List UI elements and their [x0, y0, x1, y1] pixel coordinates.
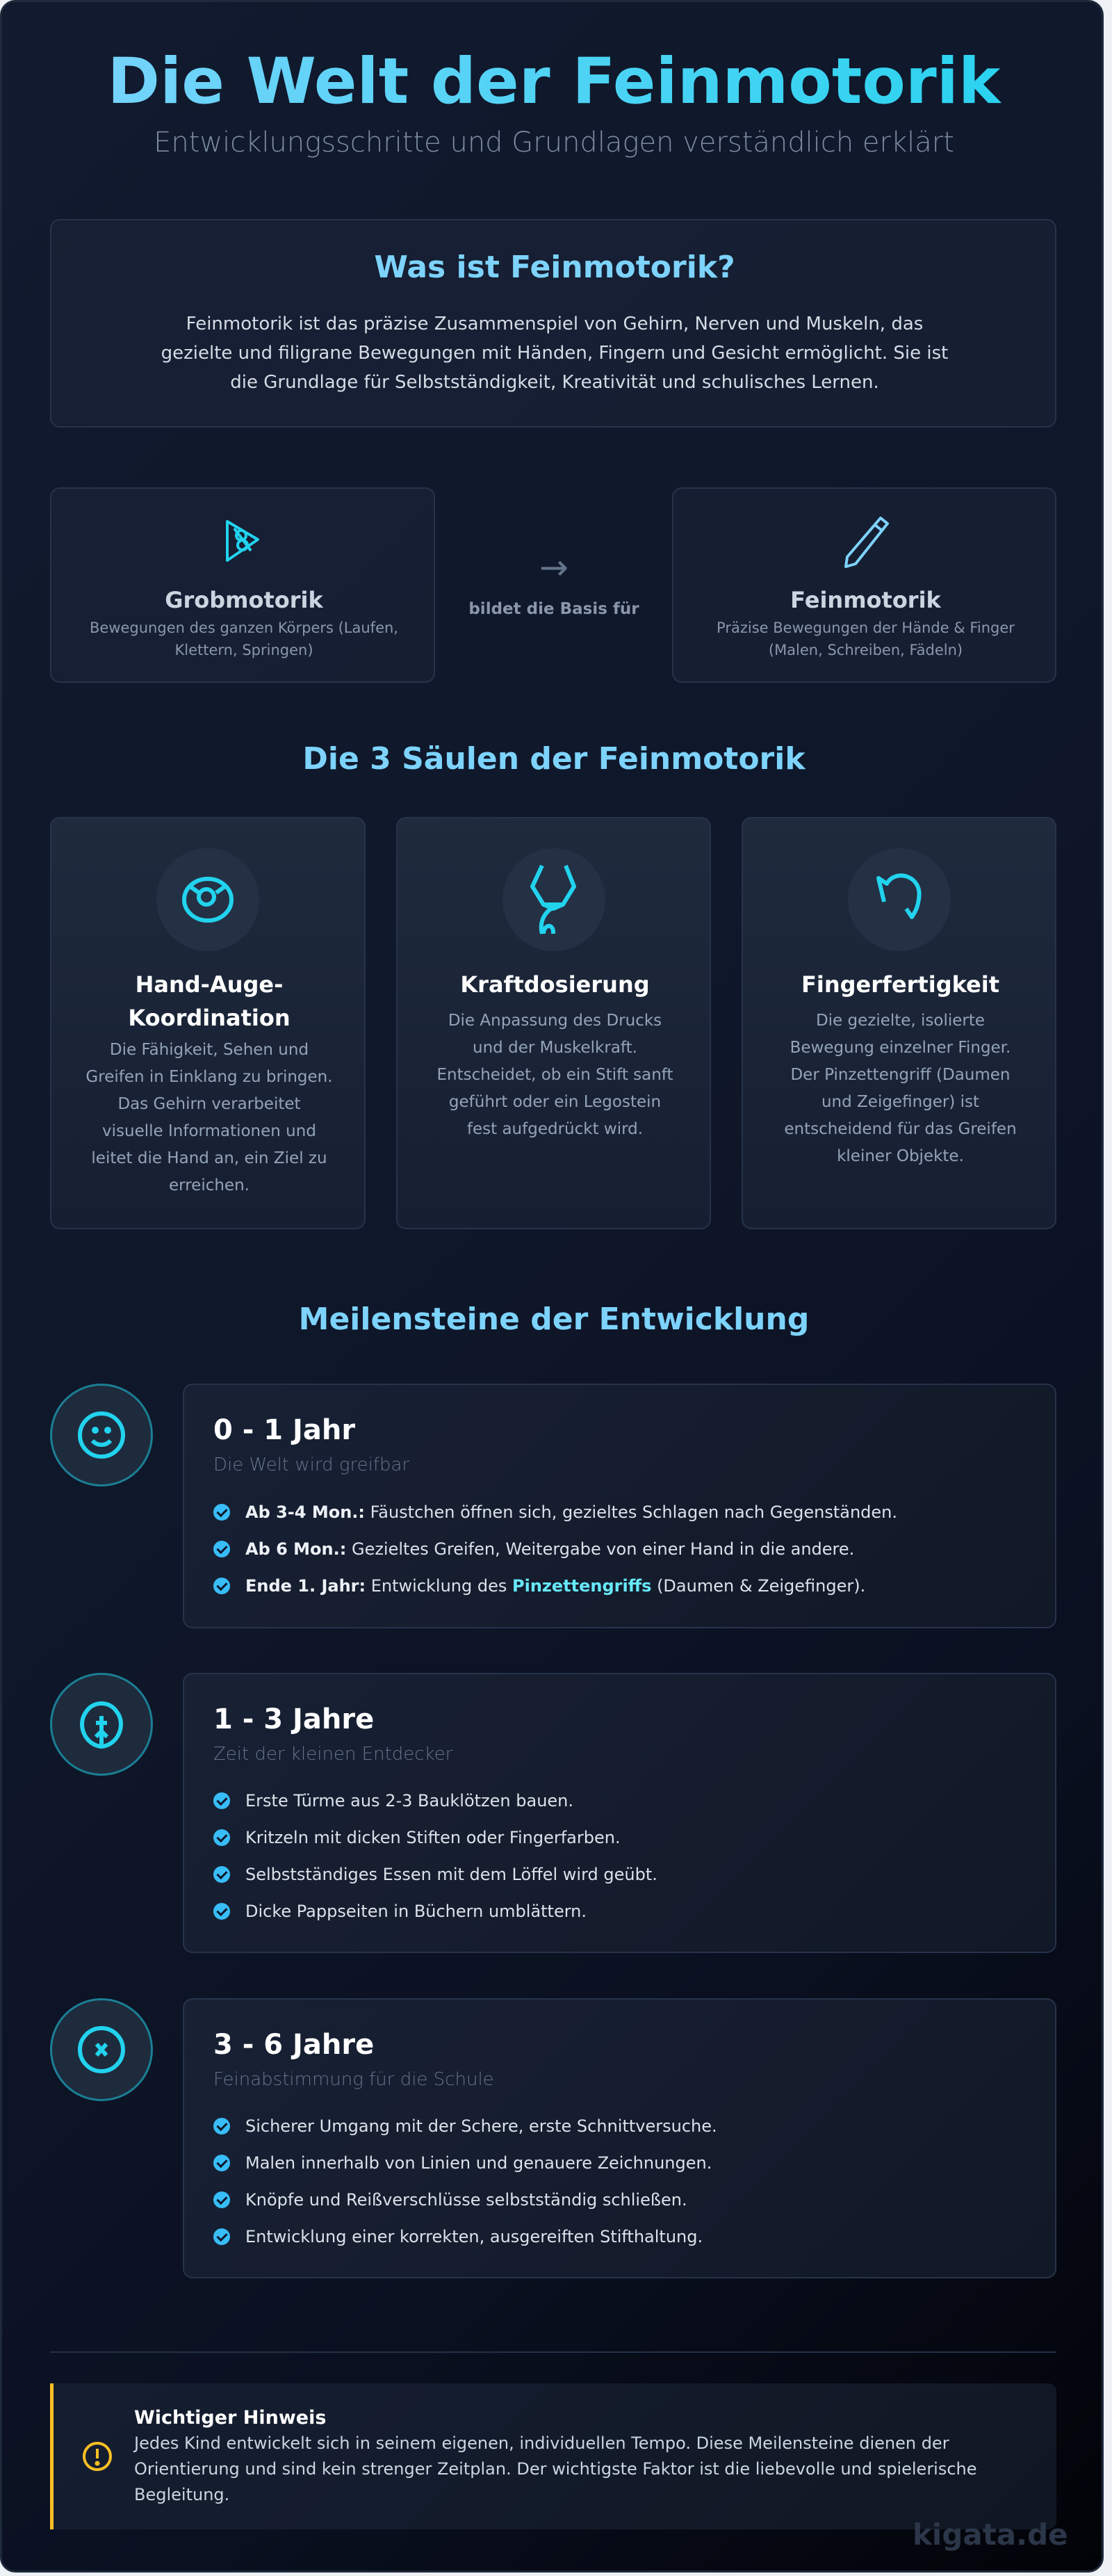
text: Greifen in Einklang zu bringen. — [85, 1068, 333, 1086]
text — [85, 1041, 333, 1194]
icon: running figure — [226, 520, 260, 562]
text: Feinmotorik description: Präzise Bewegungen der Hände & Finger (Malen, Schreiben, Fädeln) — [717, 619, 1015, 658]
text — [784, 1012, 1017, 1165]
text: Die Fähigkeit, Sehen und — [110, 1041, 309, 1059]
icon: eye — [156, 848, 259, 951]
heading: Koordination — [128, 1005, 291, 1031]
heading: 1 - 3 Jahre — [213, 1703, 374, 1735]
heading: 3 - 6 Jahre — [213, 2029, 374, 2061]
text: fest aufgedrückt wird. — [467, 1120, 643, 1138]
text: Bewegung einzelner Finger. — [790, 1039, 1011, 1057]
callout: Wichtiger Hinweis — [50, 2383, 1056, 2529]
subtitle: Zeit der kleinen Entdecker — [213, 1744, 452, 1765]
text: visuelle Informationen und — [102, 1122, 316, 1140]
icon: pencil — [844, 516, 890, 568]
text: Grobmotorik description: Bewegungen des ganzen Körpers (Laufen, Klettern, Springen) — [90, 619, 398, 658]
text: und Zeigefinger) ist — [821, 1093, 979, 1111]
heading: Wichtiger Hinweis — [134, 2407, 326, 2429]
list item: Knöpfe und Reißverschlüsse selbstständig schließen. — [245, 2190, 687, 2210]
arrow: bildet die Basis für — [468, 547, 639, 618]
panel: Fingerfertigkeit — [742, 817, 1056, 1229]
heading: 0 - 1 Jahr — [213, 1414, 355, 1446]
icon: gripper — [502, 848, 605, 951]
list item: Ab 6 Mon.: Gezieltes Greifen, Weitergabe von einer Hand in die andere. — [245, 1539, 854, 1559]
subtitle: Die Welt wird greifbar — [213, 1455, 409, 1475]
subtitle: Feinabstimmung für die Schule — [213, 2069, 494, 2090]
text: und der Muskelkraft. — [473, 1039, 637, 1057]
text: definition: gezielte und filigrane Bewegungen mit Händen, Fingern und Gesicht ermöglicht. Sie ist — [161, 343, 948, 364]
heading: Die 3 Säulen: Die 3 Säulen der Feinmotorik — [302, 741, 806, 777]
heading: Fingerfertigkeit — [801, 971, 999, 998]
text: Das Gehirn verarbeitet — [117, 1095, 301, 1113]
text: leitet die Hand an, ein Ziel zu — [91, 1149, 327, 1167]
list item: Kritzeln mit dicken Stiften oder Fingerfarben. — [245, 1828, 621, 1847]
heading: Hand-Auge- — [136, 971, 283, 998]
text: definition — [161, 314, 948, 393]
list item: Malen innerhalb von Linien und genauere Zeichnungen. — [245, 2153, 712, 2173]
text: geführt oder ein Legostein — [449, 1093, 661, 1111]
panel: 0 - 1 Jahr — [183, 1384, 1056, 1628]
list item: Erste Türme aus 2-3 Bauklötzen bauen. — [245, 1791, 573, 1811]
list item: Ab 3-4 Mon.: Fäustchen öffnen sich, gezieltes Schlagen nach Gegenständen. — [245, 1502, 897, 1522]
text — [436, 1012, 673, 1138]
heading — [128, 971, 291, 1031]
heading: Kraftdosierung — [460, 971, 650, 998]
text: Die Anpassung des Drucks — [448, 1012, 662, 1030]
icon: finger loop — [848, 848, 951, 951]
panel: 3 - 6 Jahre — [183, 1998, 1056, 2278]
icon: warning — [83, 2442, 112, 2471]
text: kleiner Objekte. — [837, 1147, 964, 1165]
list item: Dicke Pappseiten in Büchern umblättern. — [245, 1902, 587, 1921]
heading: Meilensteine: Meilensteine der Entwicklung — [299, 1302, 809, 1337]
text: Jedes Kind entwickelt sich in seinem eigenen, individuellen Tempo. Diese Meilensteine dienen der Orientierung und sind kein strenger Zeitplan. Der wichtigste Faktor ist die liebevolle und spielerische Begleitung. — [134, 2433, 977, 2504]
arrow: bildet die Basis für: bildet die Basis für — [468, 600, 639, 618]
text: definition: Feinmotorik ist das präzise Zusammenspiel von Gehirn, Nerven und Muskeln, das — [186, 314, 923, 334]
text: erreichen. — [169, 1176, 250, 1194]
arrow: bildet die Basis für: → — [539, 547, 569, 588]
heading: Was ist Feinmotorik: Was ist Feinmotorik? — [374, 250, 735, 285]
panel: Kraftdosierung — [396, 817, 711, 1229]
title: Die Welt der Feinmotorik — [108, 45, 1000, 118]
list item: Sicherer Umgang mit der Schere, erste Schnittversuche. — [245, 2116, 717, 2136]
panel: Feinmotorik — [672, 487, 1056, 683]
text: definition: die Grundlage für Selbstständigkeit, Kreativität und schulisches Lernen. — [230, 372, 879, 393]
list item: Entwicklung einer korrekten, ausgereiften Stifthaltung. — [245, 2227, 703, 2246]
list item: Ende 1. Jahr: Entwicklung des Pinzettengriffs (Daumen & Zeigefinger). — [245, 1576, 865, 1596]
icon: scissors milestone 3 — [50, 1998, 153, 2101]
text: Die gezielte, isolierte — [816, 1012, 985, 1030]
text: Der Pinzettengriff (Daumen — [790, 1066, 1011, 1084]
text: Entscheidet, ob ein Stift sanft — [436, 1066, 673, 1084]
panel: Hand-Auge-Koordination — [50, 817, 366, 1229]
text: entscheidend für das Greifen — [784, 1120, 1017, 1138]
list item: Selbstständiges Essen mit dem Löffel wird geübt. — [245, 1865, 657, 1884]
icon: child milestone 2 — [50, 1673, 153, 1776]
heading: Grobmotorik: Grobmotorik — [165, 587, 323, 613]
heading: Feinmotorik: Feinmotorik — [790, 587, 941, 613]
panel: Was ist Feinmotorik — [50, 219, 1056, 428]
icon: smiley milestone 1 — [50, 1384, 153, 1487]
panel: 1 - 3 Jahre — [183, 1673, 1056, 1953]
subtitle: Entwicklungsschritte und Grundlagen verständlich erklärt — [154, 127, 954, 159]
watermark: kigata.de: kigata.de — [913, 2518, 1068, 2552]
panel: Grobmotorik — [50, 487, 435, 683]
